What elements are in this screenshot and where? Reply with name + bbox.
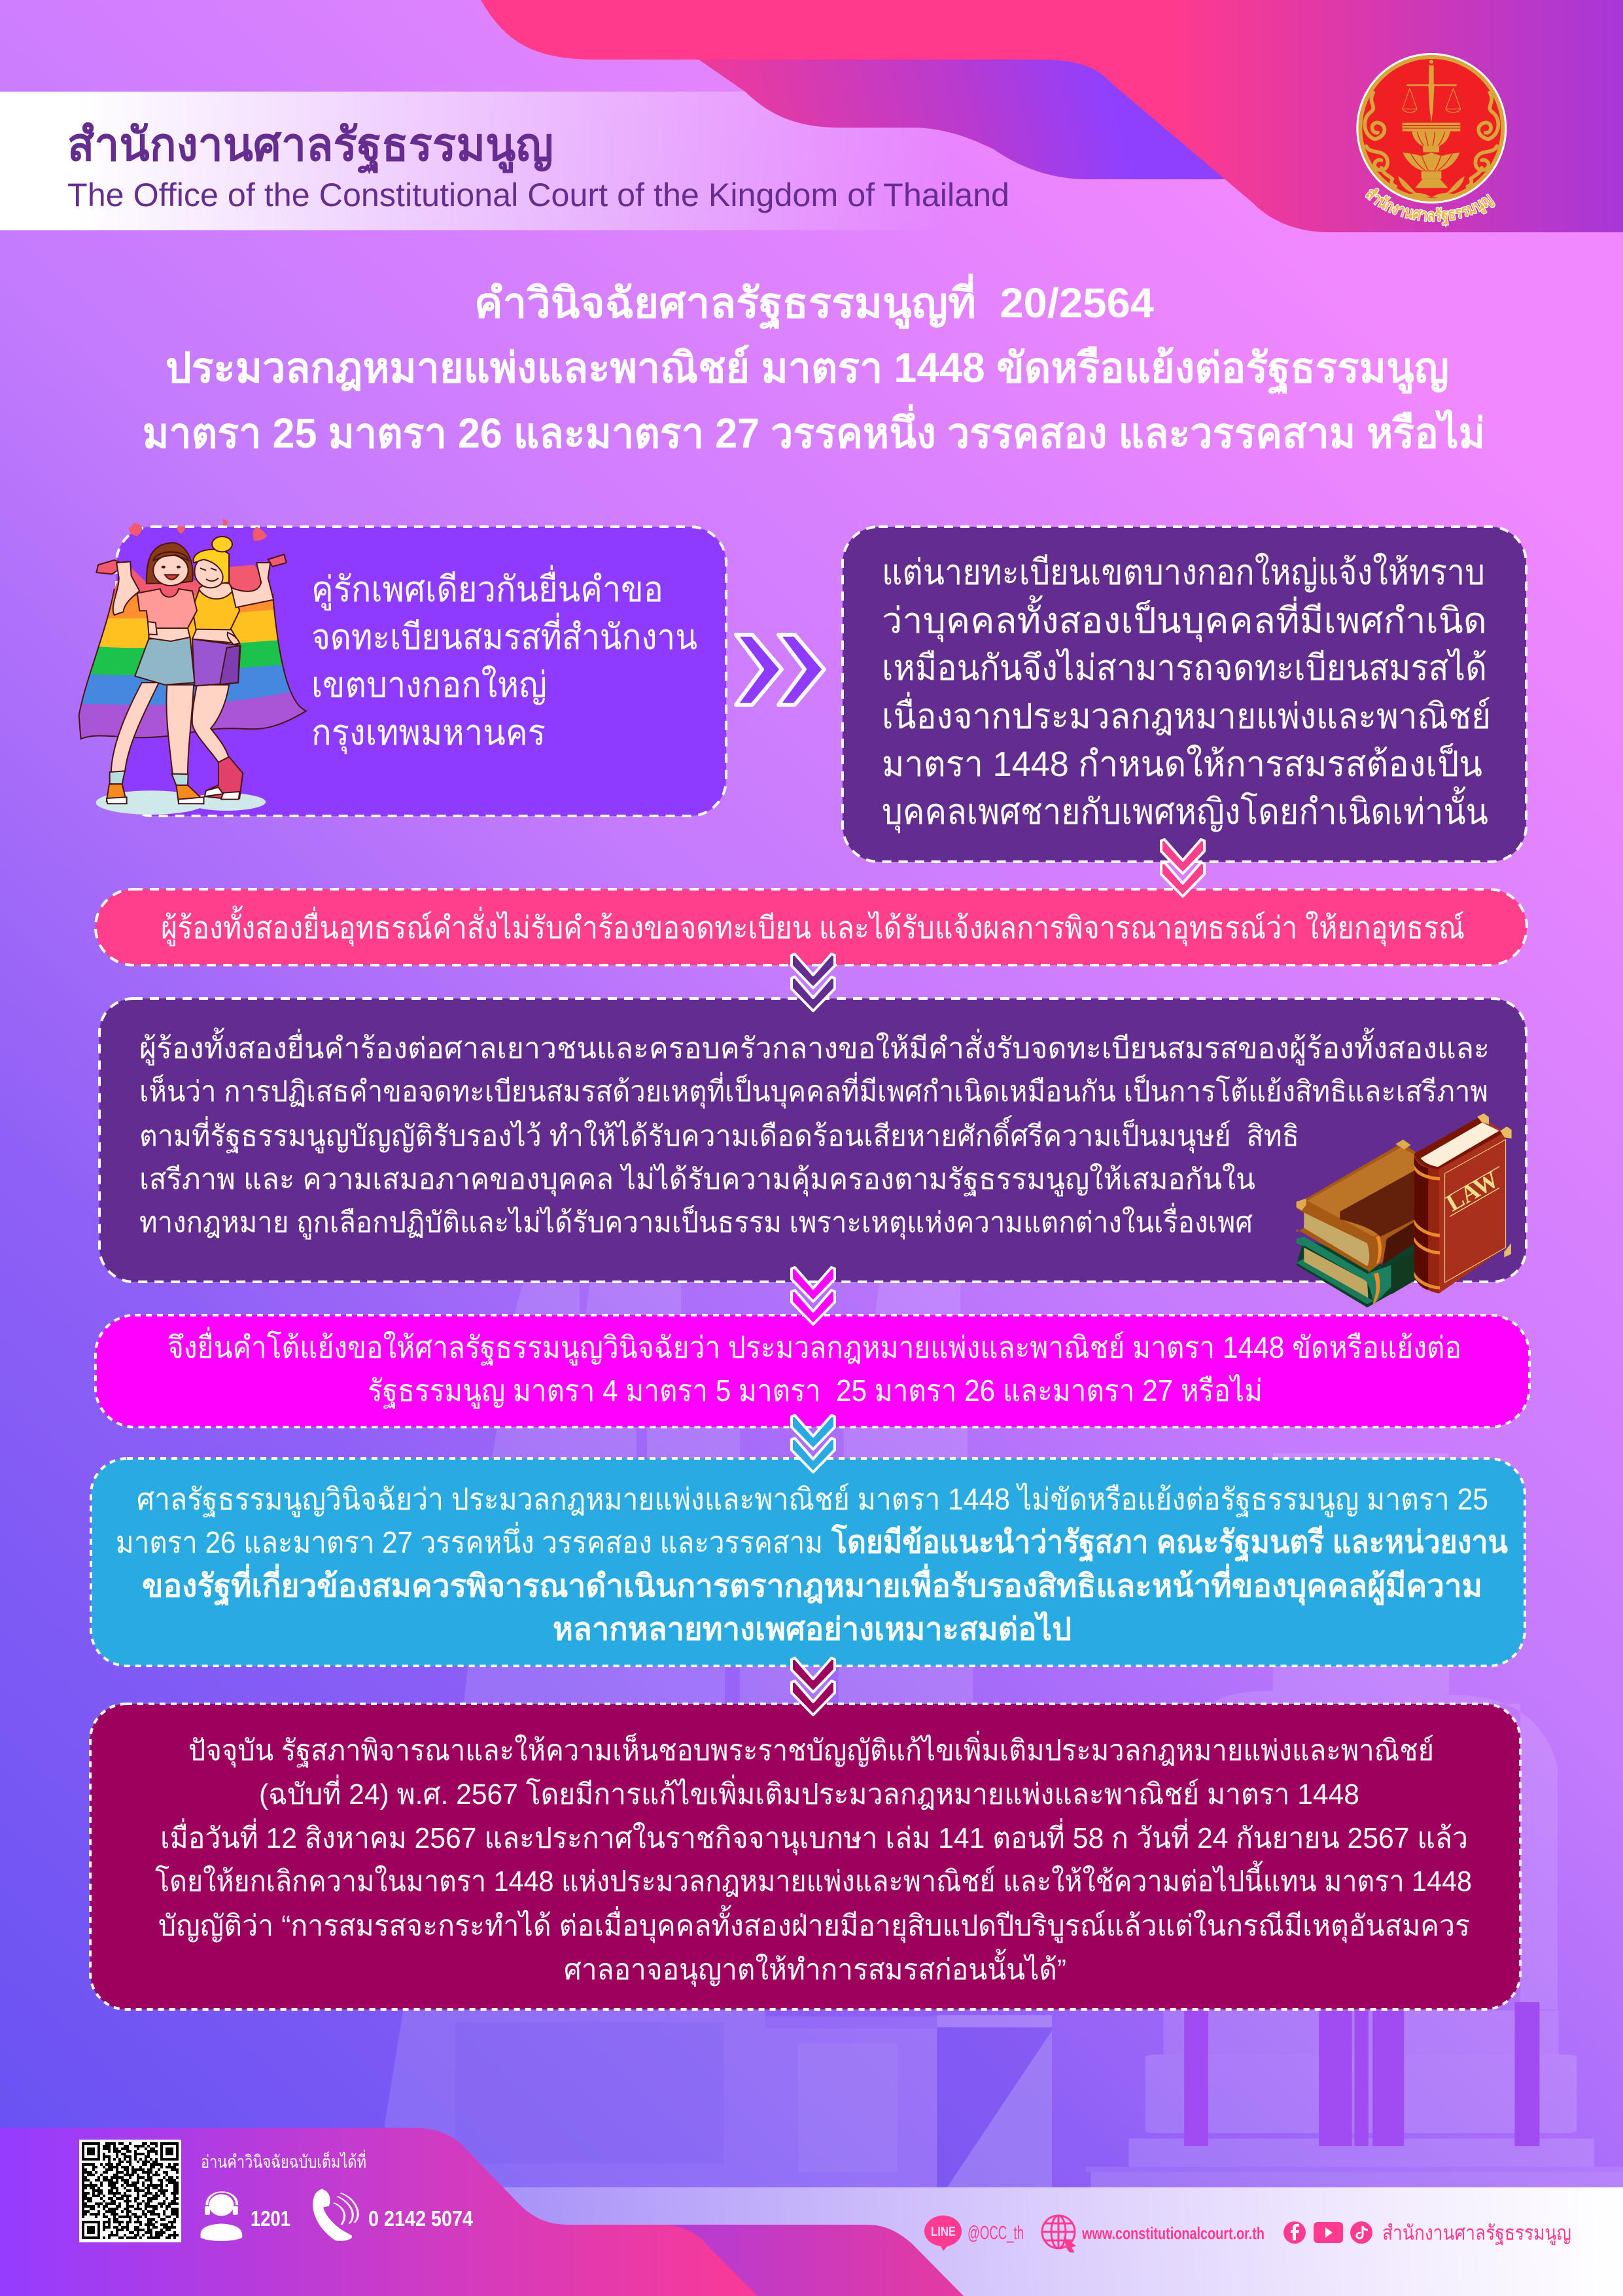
header band bbox=[0, 92, 949, 230]
title: ประมวลกฎหมายแพ่งและพาณิชย์ มาตรา 1448 ขัดหรือแย้งต่อรัฐธรรมนูญ bbox=[166, 344, 1449, 395]
arrow: down chevrons to amendment panel bbox=[792, 1658, 835, 1715]
panel: registrar refuses registration: บุคคลเพศชายกับเพศหญิงโดยกำเนิดเท่านั้น bbox=[882, 786, 1488, 834]
panel: current amendment to Section 1448: โดยให้ยกเลิกความในมาตรา 1448 แห่งประมวลกฎหมายแพ่งและพาณิชย์ และให้ใช้ความต่อไปนี้แทน มาตรา 1448 bbox=[155, 1860, 1472, 1898]
LINE account: @OCC_th bbox=[968, 2223, 1024, 2244]
illustration: law books: LAW bbox=[1442, 1166, 1503, 1217]
social media name: สำนักงานศาลรัฐธรรมนูญ bbox=[1382, 2221, 1571, 2245]
icon: TikTok bbox=[1350, 2221, 1372, 2244]
panel: registrar refuses registration: ว่าบุคคลทั้งสองเป็นบุคคลที่มีเพศกำเนิด bbox=[882, 595, 1487, 643]
arrow: down chevrons to question panel bbox=[792, 1267, 835, 1324]
QR caption: อ่านคำวินิจฉัยฉบับเต็มได้ที่ bbox=[201, 2149, 366, 2172]
arrow: down chevrons to petition panel bbox=[792, 954, 835, 1011]
organisation name bbox=[67, 119, 1009, 213]
title: คำวินิจฉัยศาลรัฐธรรมนูญที่ 20/2564 bbox=[474, 274, 1154, 330]
panel: appeal dismissed: ผู้ร้องทั้งสองยื่นอุทธรณ์คำสั่งไม่รับคำร้องขอจดทะเบียน และได้รับแจ้งผลการพิจารณาอุทธรณ์ว่า ให้ยกอุทธรณ์ bbox=[161, 906, 1465, 947]
icon: LINE bbox=[924, 2216, 962, 2251]
icon: Facebook bbox=[1283, 2221, 1306, 2244]
background monument silhouette bbox=[385, 1282, 1623, 2187]
panel: registrar refuses registration bbox=[843, 527, 1526, 862]
phone number: 0 2142 5074 bbox=[368, 2206, 474, 2231]
panel: Court ruling: หลากหลายทางเพศอย่างเหมาะสมต่อไป bbox=[553, 1610, 1072, 1647]
panel: couple files marriage registration: จดทะเบียนสมรสที่สำนักงาน bbox=[311, 612, 697, 657]
panel: registrar refuses registration: มาตรา 1448 กำหนดให้การสมรสต้องเป็น bbox=[882, 743, 1482, 784]
panel: current amendment to Section 1448: (ฉบับที่ 24) พ.ศ. 2567 โดยมีการแก้ไขเพิ่มเติมประมวลกฎหมายแพ่งและพาณิชย์ มาตรา 1448 bbox=[259, 1774, 1359, 1810]
panel: registrar refuses registration: เนื่องจากประมวลกฎหมายแพ่งและพาณิชย์ bbox=[882, 692, 1491, 736]
footer ribbon: rear bbox=[654, 2225, 964, 2296]
organisation name: The Office of the Constitutional Court of the Kingdom of Thailand bbox=[67, 177, 1009, 213]
title: มาตรา 25 มาตรา 26 และมาตรา 27 วรรคหนึ่ง วรรคสอง และวรรคสาม หรือไม่ bbox=[143, 404, 1485, 457]
panel: petition to juvenile and family court: ทางกฎหมาย ถูกเลือกปฏิบัติและไม่ได้รับความเป็นธรรม เพราะเหตุแห่งความแตกต่างในเรื่องเพศ bbox=[139, 1202, 1253, 1240]
person one: legs, socks and shoes bbox=[107, 682, 203, 804]
icon: LINE: LINE bbox=[931, 2225, 956, 2239]
illustration: law books bbox=[1297, 1114, 1512, 1307]
panel: Court ruling: มาตรา 26 และมาตรา 27 วรรคหนึ่ง วรรคสอง และวรรคสาม bbox=[116, 1521, 823, 1559]
icon: globe bbox=[1042, 2216, 1075, 2252]
panel: petition to juvenile and family court: เสรีภาพ และ ความเสมอภาคของบุคคล ไม่ได้รับความคุ้มครองตามรัฐธรรมนูญให้เสมอกันใน bbox=[139, 1163, 1255, 1197]
seal of the Constitutional Court bbox=[1356, 53, 1507, 228]
person two: legs and boots bbox=[192, 685, 243, 800]
illustration: couple with rainbow flag bbox=[79, 518, 307, 815]
panel: current amendment to Section 1448: ศาลอาจอนุญาตให้ทำการสมรสก่อนนั้นได้” bbox=[564, 1949, 1066, 1987]
header ribbon: upper pink bbox=[481, 0, 1623, 232]
panel: Court ruling: ของรัฐที่เกี่ยวข้องสมควรพิจารณาดำเนินการตรากฎหมายเพื่อรับรองสิทธิและหน้าที่ของบุคคลผู้มีความ bbox=[142, 1563, 1482, 1606]
panel: question to Constitutional Court bbox=[96, 1315, 1529, 1427]
panel: couple files marriage registration: เขตบางกอกใหญ่ bbox=[311, 665, 547, 705]
panel: petition to juvenile and family court bbox=[99, 998, 1526, 1282]
icon: call-centre agent bbox=[200, 2192, 242, 2241]
helpline 1201: 1201 bbox=[251, 2206, 290, 2231]
organisation name: สำนักงานศาลรัฐธรรมนูญ bbox=[67, 119, 553, 174]
footer ribbon: front bbox=[0, 2128, 758, 2296]
panel: registrar refuses registration: แต่นายทะเบียนเขตบางกอกใหญ่แจ้งให้ทราบ bbox=[882, 552, 1485, 592]
arrow: double chevron right bbox=[736, 635, 824, 705]
panel: current amendment to Section 1448: บัญญัติว่า “การสมรสจะกระทำได้ ต่อเมื่อบุคคลทั้งสองฝ่ายมีอายุสิบแปดปีบริบูรณ์แล้วแต่ในกรณีมีเหตุอันสมควร bbox=[158, 1905, 1470, 1943]
panel: Court ruling: โดยมีข้อแนะนำว่ารัฐสภา คณะรัฐมนตรี และหน่วยงาน bbox=[831, 1523, 1508, 1563]
person two: body bbox=[192, 537, 273, 686]
QR code bbox=[79, 2140, 181, 2242]
panel: question to Constitutional Court: จึงยื่นคำโต้แย้งขอให้ศาลรัฐธรรมนูญวินิจฉัยว่า ประมวลกฎหมายแพ่งและพาณิชย์ มาตรา 1448 ขัดหรือแย้งต่อ bbox=[167, 1326, 1461, 1366]
person one: body bbox=[113, 542, 197, 685]
title bbox=[143, 274, 1485, 457]
panel: question to Constitutional Court: รัฐธรรมนูญ มาตรา 4 มาตรา 5 มาตรา 25 มาตรา 26 และมาตรา 27 หรือไม่ bbox=[368, 1373, 1263, 1409]
panel: couple files marriage registration bbox=[116, 527, 726, 816]
icon: telephone bbox=[313, 2189, 358, 2241]
panel: petition to juvenile and family court: เห็นว่า การปฏิเสธคำขอจดทะเบียนสมรสด้วยเหตุที่เป็นบุคคลที่มีเพศกำเนิดเหมือนกัน เป็นการโต้แย้งสิทธิและเสรีภาพ bbox=[139, 1071, 1488, 1109]
panel: Court ruling bbox=[91, 1458, 1525, 1666]
panel: petition to juvenile and family court: ผู้ร้องทั้งสองยื่นคำร้องต่อศาลเยาวชนและครอบครัวกลางขอให้มีคำสั่งรับจดทะเบียนสมรสของผู้ร้องทั้งสองและ bbox=[139, 1027, 1490, 1066]
header ribbon: lower purple bbox=[699, 60, 1243, 179]
panel: registrar refuses registration: เหมือนกันจึงไม่สามารถจดทะเบียนสมรสได้ bbox=[882, 648, 1487, 688]
panel: current amendment to Section 1448: ปัจจุบัน รัฐสภาพิจารณาและให้ความเห็นชอบพระราชบัญญัติแก้ไขเพิ่มเติมประมวลกฎหมายแพ่งและพาณิชย์ bbox=[188, 1730, 1434, 1768]
panel: appeal dismissed bbox=[96, 889, 1527, 965]
panel: current amendment to Section 1448 bbox=[90, 1704, 1520, 2009]
arrow: down chevrons to ruling panel bbox=[792, 1415, 835, 1472]
panel: petition to juvenile and family court: ตามที่รัฐธรรมนูญบัญญัติรับรองไว้ ทำให้ได้รับความเดือดร้อนเสียหายศักดิ์ศรีความเป็นมนุษย์ สิทธิ bbox=[139, 1115, 1299, 1154]
seal of the Constitutional Court: สำนักงานศาลรัฐธรรมนูญ bbox=[1365, 187, 1495, 228]
icon: YouTube bbox=[1314, 2222, 1343, 2243]
panel: couple files marriage registration: คู่รักเพศเดียวกันยื่นคำขอ bbox=[311, 565, 663, 610]
panel: current amendment to Section 1448: เมื่อวันที่ 12 สิงหาคม 2567 และประกาศในราชกิจจานุเบกษา เล่ม 141 ตอนที่ 58 ก วันที่ 24 กันยายน 2567 แล้ว bbox=[160, 1818, 1468, 1856]
footer white band bbox=[504, 2187, 1623, 2296]
panel: couple files marriage registration: กรุงเทพมหานคร bbox=[311, 713, 546, 754]
panel: Court ruling: ศาลรัฐธรรมนูญวินิจฉัยว่า ประมวลกฎหมายแพ่งและพาณิชย์ มาตรา 1448 ไม่ขัดหรือแย้งต่อรัฐธรรมนูญ มาตรา 25 bbox=[137, 1482, 1488, 1517]
website address: www.constitutionalcourt.or.th bbox=[1081, 2223, 1265, 2243]
arrow: down chevrons to appeal panel bbox=[1161, 839, 1204, 896]
